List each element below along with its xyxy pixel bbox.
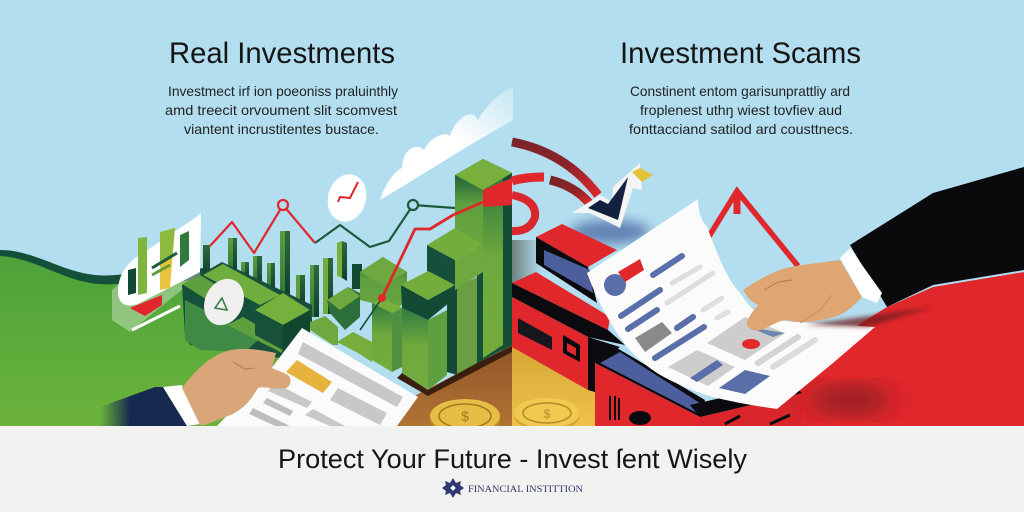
text block: real investments: [165, 83, 398, 137]
text block: investment scams: Constinent entom garisunprattliy ard: [630, 83, 850, 99]
scam document: [587, 199, 875, 409]
text block: investment scams: fonttacciand satilod ard cousttnecs.: [629, 121, 853, 137]
gold tiled base right: [512, 346, 600, 426]
small bar chart columns: [203, 231, 362, 317]
check mark badge: [572, 163, 653, 228]
red warning arrow: [708, 191, 798, 266]
dark shading on red ground: [808, 388, 892, 412]
small center blocks: [310, 287, 372, 362]
red trend line to arrow: [360, 178, 512, 330]
illustration: [0, 87, 1024, 438]
logo icon: [442, 478, 464, 498]
blue haze behind scam boxes: [570, 220, 650, 244]
gold coin right: $: [544, 407, 551, 421]
widget: bar chart panel: [112, 212, 201, 332]
text block: investment scams: [629, 83, 853, 137]
gold coin right: [514, 398, 580, 426]
grey seam shadow on scam side: [512, 240, 542, 290]
suit sleeve and cuff: [840, 167, 1024, 307]
line chart: red and green trend: [210, 200, 455, 253]
text block: investment scams: froplenest uthŋ wiest tovfiev aud: [640, 102, 842, 118]
clock badge: [328, 174, 366, 222]
heading: investment scams: Investment Scams: [620, 37, 861, 70]
heading: real investments: Real Investments: [169, 37, 395, 70]
left hand: [100, 349, 290, 426]
text block: real investments: Investmect irf ion poeoniss praluinthly: [168, 83, 398, 99]
footer band: [0, 426, 1024, 512]
right hand: [743, 260, 862, 331]
cloud: [380, 87, 513, 200]
footer slogan: Protect Your Future - Invest ſent Wisely: [278, 444, 747, 474]
text block: real investments: amd treecit orvoument slit scomvest: [165, 102, 397, 118]
red scam boxes: [512, 224, 802, 426]
wood base left: [397, 345, 512, 426]
green hill: [0, 250, 280, 426]
text block: real investments: viantent incrustitentes bustace.: [184, 121, 379, 137]
curved dark red arrows: [512, 142, 598, 231]
left isometric blocks: [182, 262, 312, 358]
tall growth blocks: [360, 159, 512, 396]
coin badge with triangle: [204, 278, 244, 326]
gold coin left: $: [461, 408, 469, 424]
red ground: [790, 272, 1024, 426]
gold coin left: [430, 399, 500, 426]
shadow under right hand: [805, 307, 933, 327]
document held by left hand: [217, 328, 418, 426]
logo text: FINANCIAL INSTITTION: [468, 485, 583, 495]
